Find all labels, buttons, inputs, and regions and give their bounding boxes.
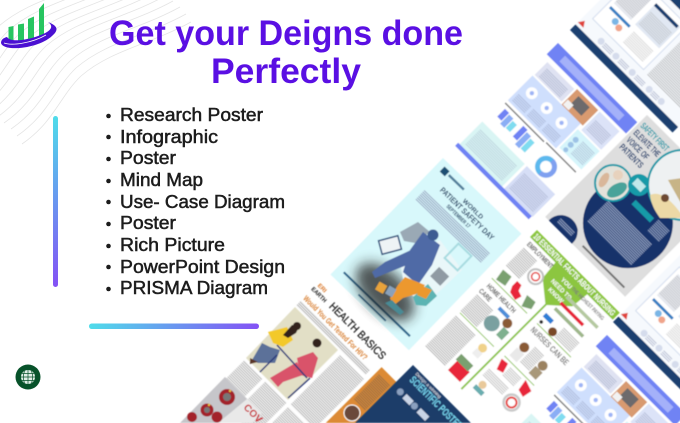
background contour lines xyxy=(0,0,191,144)
poster: scientific poster: Design a winning xyxy=(414,371,443,399)
poster: health basics article: HEALTH BASICS xyxy=(326,301,388,362)
poster: world patient safety day: PATIENT SAFETY DAY xyxy=(438,186,496,242)
poster: 10 essential facts about nursing: THE HIGHEST PAYING xyxy=(570,287,605,322)
bullet list of services: Poster xyxy=(120,148,176,168)
poster: scientific poster xyxy=(355,365,471,423)
vertical gradient bar xyxy=(53,116,58,287)
poster: safety first: ELEVATE THE xyxy=(631,128,663,159)
bullet list of services: Research Poster xyxy=(120,105,263,125)
poster: 10 essential facts about nursing xyxy=(415,230,620,423)
poster: safety first xyxy=(545,115,680,297)
poster: 10 essential facts about nursing: HOME HEALTH xyxy=(485,282,518,315)
icon: globe badge xyxy=(16,364,40,390)
bullet list of services: Rich Picture xyxy=(120,235,225,255)
poster: health basics article: ERI xyxy=(316,283,327,295)
horizontal gradient bar xyxy=(89,324,259,329)
green header band: 10 ESSENTIAL FACTS ABOUT NURSING xyxy=(531,231,618,318)
poster: blue research poster xyxy=(455,43,637,225)
green header band: NEED TO xyxy=(549,279,572,302)
title: Perfectly xyxy=(211,52,362,91)
bullet list of services: Infographic xyxy=(120,127,218,147)
poster: world patient safety day: WORLD xyxy=(461,198,485,221)
poster: 10 essential facts about nursing: NURSES CAN BE xyxy=(529,325,571,368)
green header band xyxy=(504,230,620,346)
poster: covid cover xyxy=(180,377,264,423)
logo: green bars with purple ring xyxy=(1,3,57,48)
title: Get your Deigns done xyxy=(109,14,463,53)
poster: safety first: VOICE OF xyxy=(624,135,651,162)
green header band: YOU xyxy=(559,277,572,291)
poster: health basics article xyxy=(210,282,408,423)
bullet list of services: Poster xyxy=(120,213,176,233)
poster: 10 essential facts about nursing: EMPLOYMENT xyxy=(525,241,554,271)
poster: world patient safety day xyxy=(330,158,521,350)
bullet list of services: PRISMA Diagram xyxy=(120,278,268,298)
bullet list of services: Use- Case Diagram xyxy=(120,192,285,212)
bullet list of services: Mind Map xyxy=(120,170,203,190)
illustration: couple at table xyxy=(246,307,338,400)
poster: health basics article: EARTH xyxy=(309,287,327,304)
poster: world patient safety day: SEPTEMBER 17 xyxy=(445,204,471,230)
poster: safety first: PATIENTS xyxy=(617,142,646,170)
title xyxy=(109,14,463,91)
poster: 10 essential facts about nursing: CARE xyxy=(477,287,494,304)
bullet list of services xyxy=(106,105,285,298)
poster: lower right patient safety report repeat xyxy=(613,230,680,423)
bullet list of services: PowerPoint Design xyxy=(120,257,285,277)
poster: health basics article: Would You Get Tested For HIV? xyxy=(301,294,369,362)
poster: top right patient safety report xyxy=(570,0,680,133)
green header band: KNOW xyxy=(546,287,564,305)
poster: lower right research poster repeat xyxy=(504,335,680,423)
